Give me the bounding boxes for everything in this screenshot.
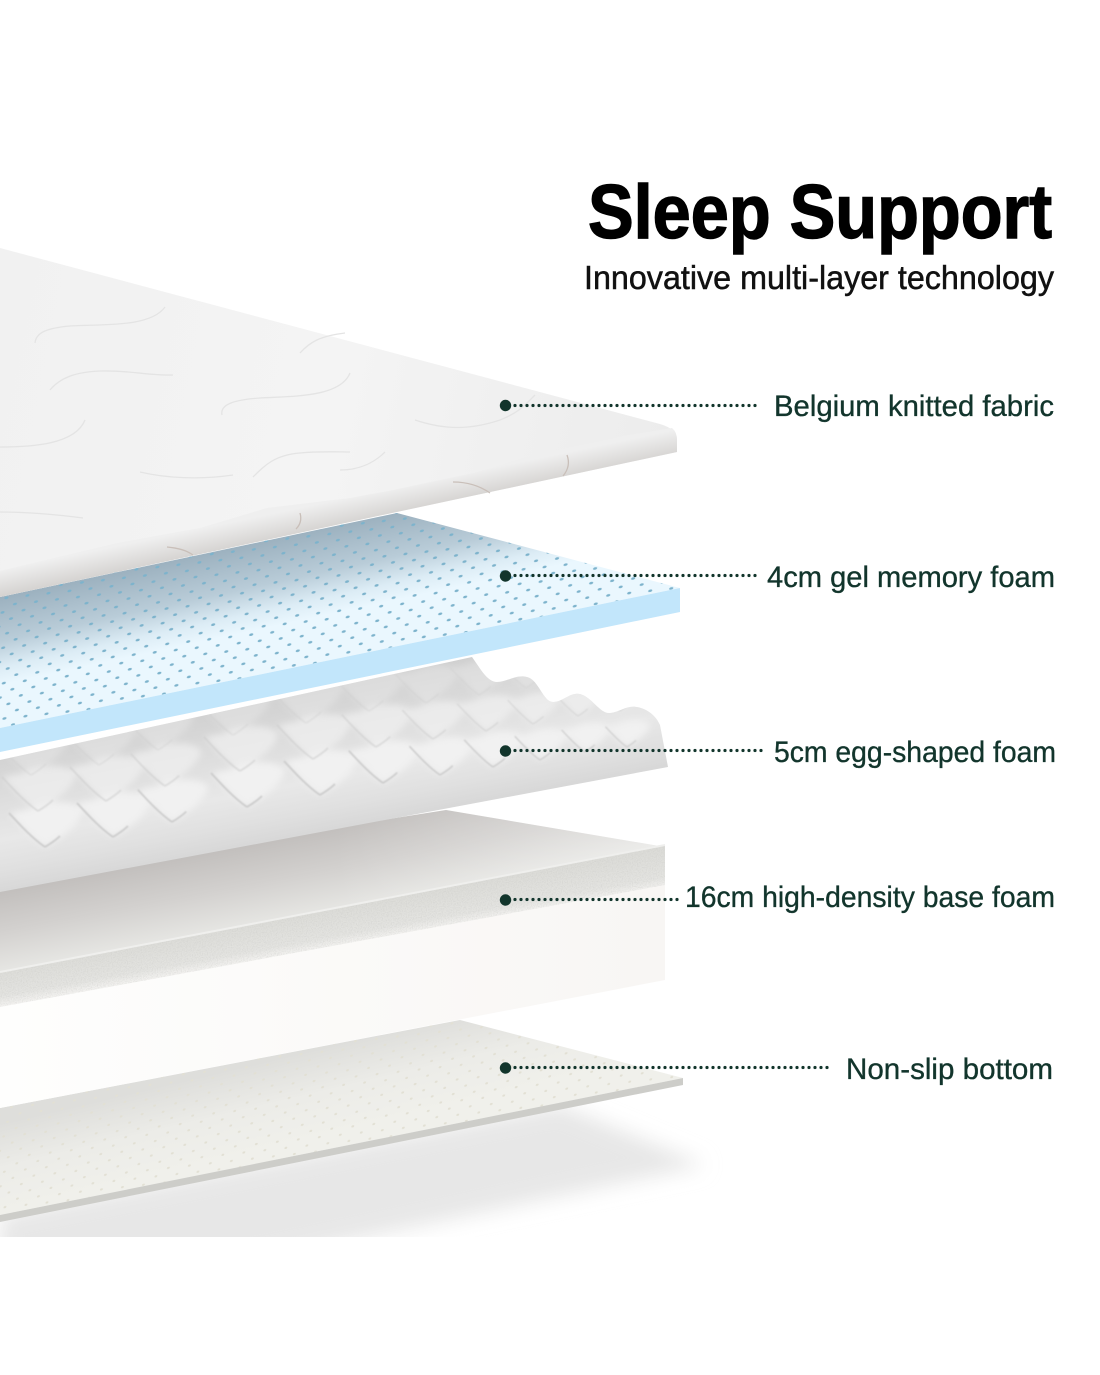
layer: high-density base foam — [0, 810, 665, 1108]
subtitle: Innovative multi-layer technology — [584, 259, 1054, 296]
shadow under mattress — [0, 1107, 690, 1237]
callout: 4cm gel memory foam — [500, 561, 1055, 594]
fabric swirl pattern — [0, 307, 535, 518]
layer: knitted fabric — [0, 248, 677, 597]
egg foam bump highlights — [7, 664, 646, 844]
base foam grain texture — [0, 845, 665, 1007]
layer: non-slip bottom — [0, 1020, 683, 1222]
callout: 4cm gel memory foam: 4cm gel memory foam — [767, 561, 1055, 594]
egg foam bump creases — [4, 700, 636, 848]
callout: Belgium knitted fabric — [500, 390, 1054, 423]
fabric edge contour lines — [167, 455, 568, 555]
callout: 16cm high-density base foam — [500, 881, 1055, 914]
title: Sleep Support — [588, 170, 1052, 255]
callout: 16cm high-density base foam: 16cm high-density base foam — [685, 881, 1055, 914]
callout: Non-slip bottom — [500, 1053, 1053, 1086]
fabric side band — [0, 428, 677, 597]
callout: Non-slip bottom: Non-slip bottom — [846, 1053, 1053, 1086]
layer: gel memory foam — [0, 513, 680, 752]
layer: egg-shaped foam — [0, 648, 668, 892]
callout: 5cm egg-shaped foam: 5cm egg-shaped foam — [774, 736, 1056, 769]
callout: Belgium knitted fabric: Belgium knitted fabric — [774, 390, 1054, 423]
callout: 5cm egg-shaped foam — [500, 736, 1056, 769]
gel foam perforation dots — [0, 513, 680, 728]
infographic canvas — [0, 182, 1054, 1237]
